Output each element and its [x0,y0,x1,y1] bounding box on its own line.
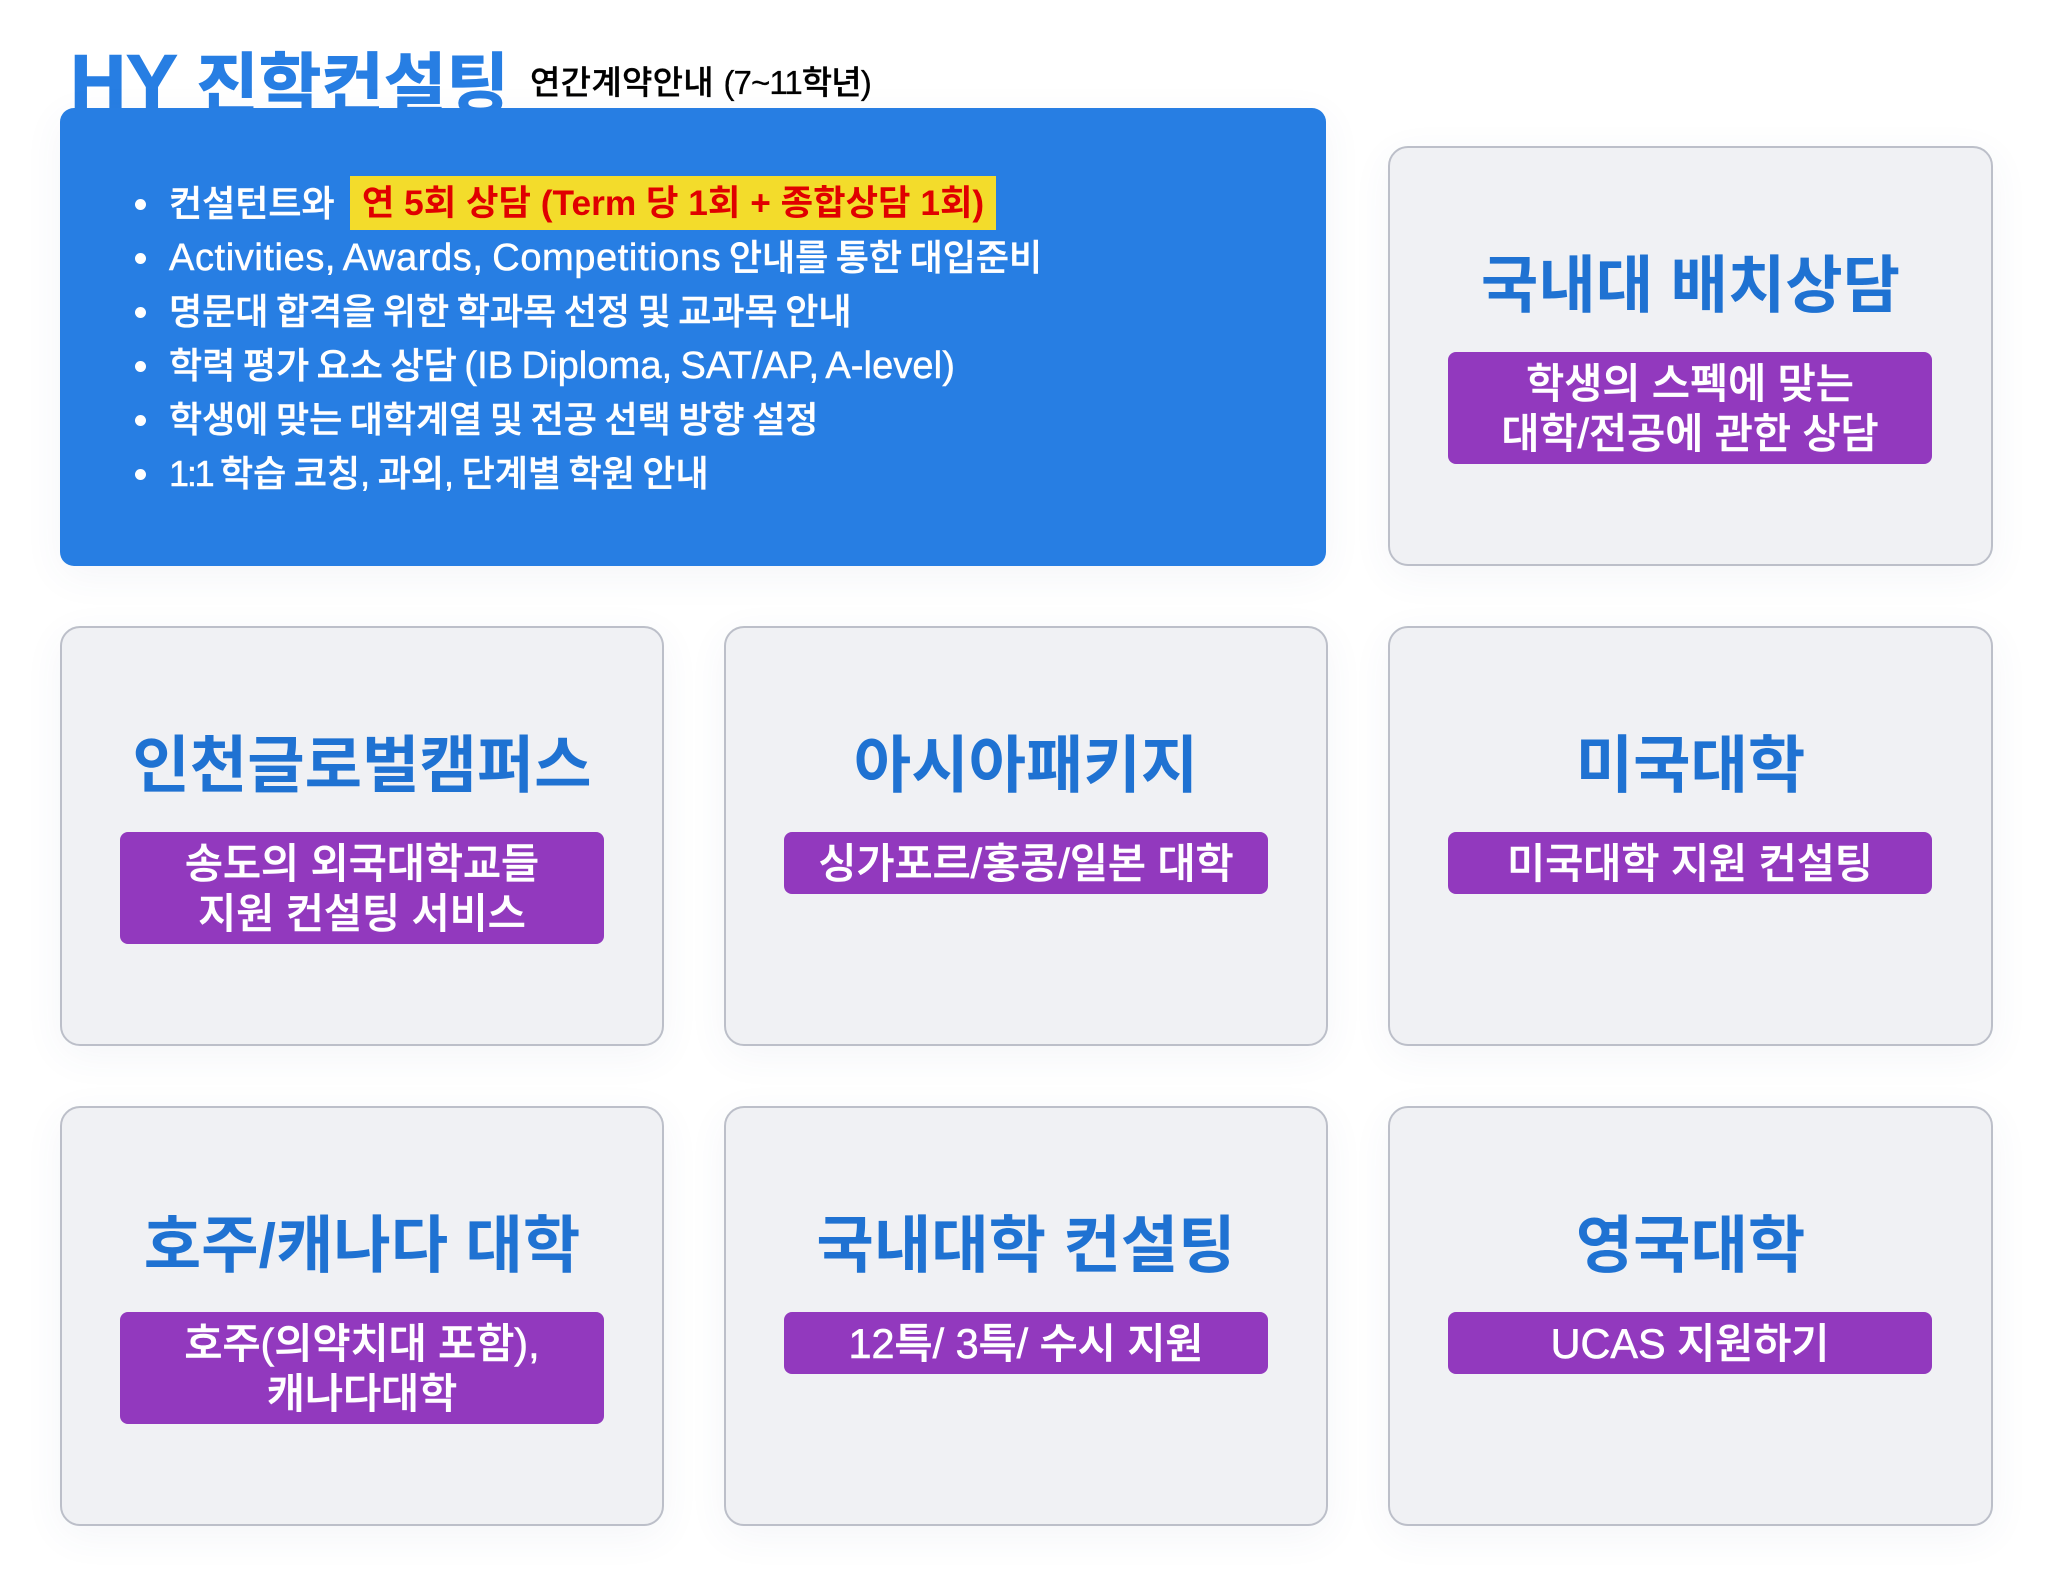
tag [120,1312,604,1424]
panel: UK universities [1388,1106,1993,1526]
heading: 국내대 배치상담 [1481,252,1900,321]
bullet 2: Activities, Awards, Competitions 안내를 통한 대입준비 [169,237,1042,279]
bullet 5: 학생에 맞는 대학계열 및 전공 선택 방향 설정 [169,399,818,440]
subtitle: 연간계약안내 (7~11학년) [530,64,871,101]
tag: 캐나다대학 [267,1371,457,1417]
highlight: five consultations [350,176,996,230]
heading: 국내대학 컨설팅 [816,1212,1236,1281]
heading: 아시아패키지 [854,732,1198,801]
tag: 호주(의약치대 포함), [184,1321,540,1367]
tag [120,832,604,944]
tag: 미국대학 지원 컨설팅 [1507,841,1873,887]
bullet 6: 1:1 학습 코칭, 과외, 단계별 학원 안내 [169,453,709,494]
tag [1448,1312,1932,1374]
heading: 호주/캐나다 대학 [144,1212,580,1281]
heading: 인천글로벌캠퍼스 [132,732,592,801]
tag: UCAS 지원하기 [1551,1321,1829,1367]
tag [784,832,1268,894]
panel: Australia and Canada [60,1106,664,1526]
panel: US universities [1388,626,1993,1046]
panel: Incheon global campus [60,626,664,1046]
tag [1448,352,1932,464]
panel: domestic consulting [724,1106,1328,1526]
tag: 학생의 스펙에 맞는 [1526,361,1854,407]
tag: 송도의 외국대학교들 [185,841,539,887]
title: HY 진학컨설팅 [70,38,509,126]
bullet 4: 학력 평가 요소 상담 (IB Diploma, SAT/AP, A-level) [169,345,955,387]
heading: 영국대학 [1576,1212,1805,1281]
tag: 12특/ 3특/ 수시 지원 [848,1321,1204,1367]
panel: domestic placement [1388,146,1993,566]
panel: contract details [60,108,1326,566]
heading: 미국대학 [1576,732,1805,801]
bullet 1: 컨설턴트와 [169,183,335,224]
bullet 3: 명문대 합격을 위한 학과목 선정 및 교과목 안내 [169,291,852,332]
highlight: five consultations: 연 5회 상담 (Term 당 1회 + 종합상담 1회) [362,184,984,223]
panel: Asia package [724,626,1328,1046]
tag: 싱가포르/홍콩/일본 대학 [818,841,1234,887]
tag: 지원 컨설팅 서비스 [198,891,526,937]
tag [1448,832,1932,894]
tag [784,1312,1268,1374]
tag: 대학/전공에 관한 상담 [1501,411,1879,457]
